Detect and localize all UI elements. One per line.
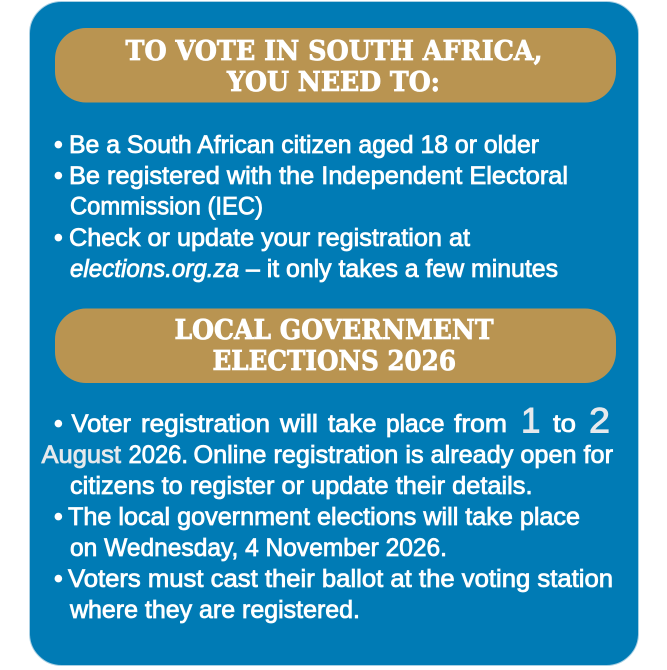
text block: voting requirements: – it only takes a few minutes [246, 255, 558, 283]
heading: to vote in South Africa: TO VOTE IN SOUTH AFRICA, [126, 36, 542, 67]
text block: voting requirements: • [54, 131, 63, 159]
text block: voting requirements: • [54, 224, 63, 252]
text block: election details: August [42, 441, 121, 469]
heading: local government elections 2026: ELECTIONS 2026 [212, 346, 456, 377]
text block: voting requirements: Commission (IEC) [70, 192, 263, 220]
text block: election details: 2026. [128, 441, 188, 469]
text block: election details: take [328, 410, 376, 438]
text block: election details: to [553, 410, 576, 438]
text block: election details: The local government elections will take place [68, 503, 580, 531]
text block: election details: Online registration is already open for [194, 441, 613, 469]
text block: voting requirements: • [54, 162, 63, 190]
heading: to vote in South Africa: YOU NEED TO: [226, 67, 440, 98]
text block: election details: Voter [72, 410, 131, 438]
heading: local government elections 2026 [174, 315, 494, 377]
text block: voting requirements: Check or update your registration at [69, 224, 470, 252]
text block: election details: will [279, 410, 318, 438]
text block: election details: • [54, 565, 63, 593]
text block: voting requirements: Be registered with the Independent Electoral [69, 162, 568, 190]
text block: voting requirements [54, 131, 568, 283]
text block: election details: Voters must cast their ballot at the voting station [68, 565, 613, 593]
text block: voting requirements: Be a South African citizen aged 18 or older [69, 131, 539, 159]
text block: election details [42, 402, 613, 624]
banner: to vote [55, 28, 616, 102]
text block: election details: citizens to register or update their details. [70, 472, 532, 500]
heading: to vote in South Africa [126, 36, 542, 98]
banner shape [55, 28, 616, 102]
text block: election details: 2 [589, 402, 610, 440]
heading: local government elections 2026: LOCAL GOVERNMENT [174, 315, 494, 346]
text block: voting requirements: elections.org.za [70, 255, 239, 283]
text block: election details: registration [141, 410, 270, 438]
banner shape [55, 308, 616, 383]
text block: election details: place [386, 410, 444, 438]
banner: local government elections [55, 308, 616, 383]
text block: election details: • [54, 503, 63, 531]
text block: election details: • [54, 410, 63, 438]
text block: election details: where they are registered. [69, 596, 360, 624]
text block: election details: 1 [521, 402, 540, 440]
text block: election details: from [454, 410, 507, 438]
text block: election details: on Wednesday, 4 November 2026. [70, 534, 447, 562]
